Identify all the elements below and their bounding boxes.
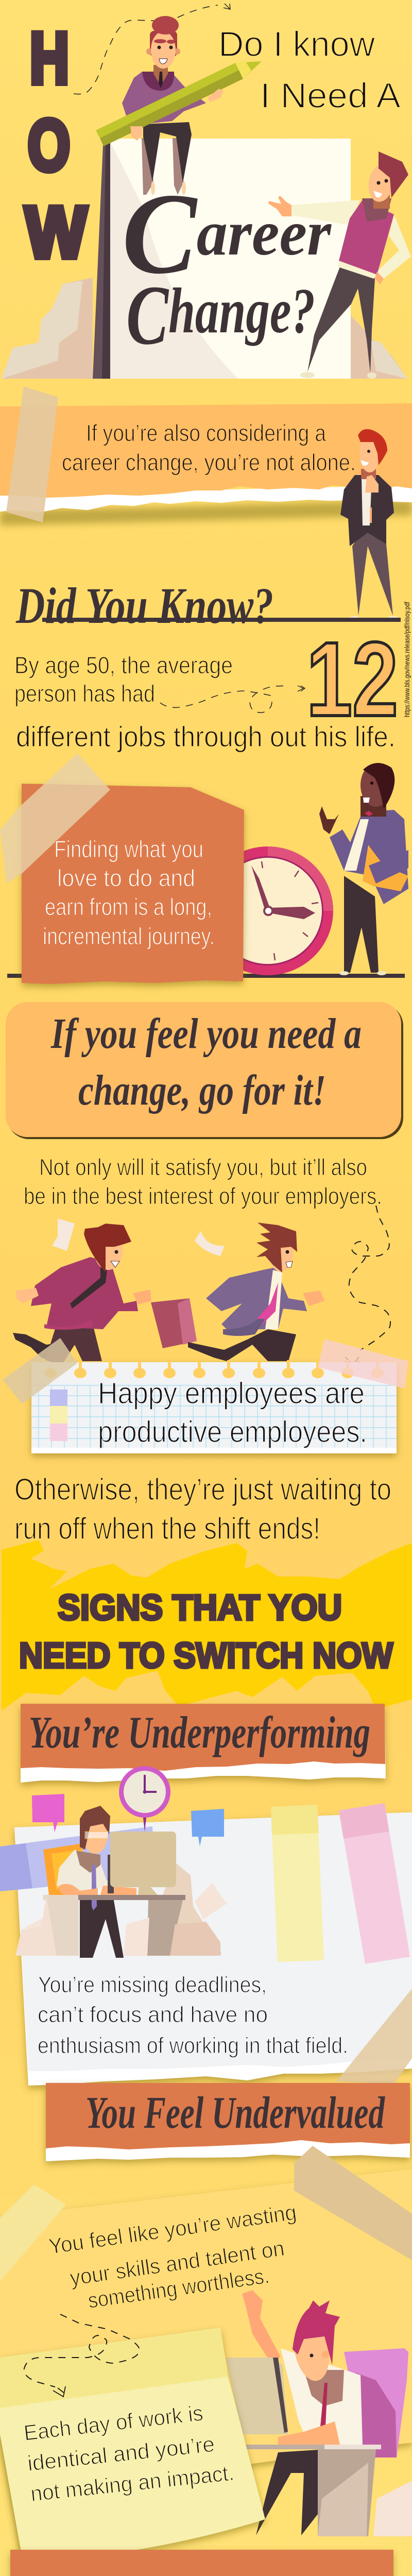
text block: otherwise: run off when the shift ends! (14, 1512, 320, 1546)
title word: HOW: W (25, 192, 87, 273)
character: man with folder (319, 763, 408, 975)
title word: HOW (25, 18, 87, 273)
banner (21, 1704, 386, 1783)
text: If you’re also considering a (86, 420, 327, 446)
paper sheet (14, 1812, 412, 2086)
panel: torn band, not alone (0, 386, 412, 619)
panel: go for it (6, 1002, 403, 1139)
script title: Career Change?: C (122, 169, 198, 298)
note text: incremental journey. (43, 923, 215, 950)
note text (47, 2200, 298, 2313)
stat text (14, 652, 396, 753)
paper: flying right (195, 1231, 225, 1256)
note text (43, 836, 215, 950)
tape (0, 753, 110, 884)
script title: Career Change?: hange? (168, 276, 315, 347)
tape (336, 1989, 412, 2084)
banner (10, 2550, 393, 2576)
tape: left (0, 2184, 66, 2281)
text block: employers (24, 1154, 382, 1209)
script title: Career Change?: areer (197, 198, 332, 269)
sticky note (0, 2328, 265, 2554)
character: man with pencil (96, 16, 262, 195)
panel: signs heading band (2, 1540, 412, 1710)
heading: Did You Know? (15, 577, 273, 634)
source url: https://www.bls.gov/news.release/pdf/nlsoy.pdf (403, 602, 411, 717)
stat text: person has had (14, 680, 155, 707)
arrow: dashed to 12 (160, 686, 305, 713)
note text: something worthless. (87, 2263, 271, 2313)
note text: your skills and talent on (68, 2236, 286, 2290)
note text: You feel like you’re wasting (47, 2200, 298, 2259)
panel: incremental journey (0, 753, 408, 984)
arrow: dashed to sticky (24, 2314, 140, 2397)
brush band (2, 1540, 412, 1710)
panel: Did You Know (14, 577, 411, 753)
sticky text: Each day of work is (23, 2401, 204, 2445)
note sheet (31, 1360, 397, 1453)
tape: right (294, 2146, 412, 2260)
speech bubble: pink (32, 1794, 64, 1832)
note: orange (22, 784, 244, 984)
big note background (0, 2169, 412, 2552)
note text: productive employees. (98, 1415, 367, 1449)
colour swatches (50, 1389, 67, 1441)
illustration: man at computer (226, 2290, 412, 2536)
note text: Happy employees are (98, 1377, 365, 1410)
note text: Finding what you (54, 836, 203, 862)
subtitle: Do I know I Need A (218, 24, 401, 115)
heading: SIGNS THAT YOU (58, 1587, 342, 1628)
script title: Career Change? (122, 169, 332, 362)
sticky text: identical and you’re (26, 2432, 216, 2476)
character: running man one (13, 1224, 151, 1365)
icon: wall clock (119, 1766, 170, 1832)
panel: underperforming (0, 1704, 412, 2086)
character: thinking man (340, 429, 398, 619)
text: career change, you’re not alone. (62, 449, 356, 476)
panel: undervalued (0, 2083, 412, 2554)
title word: HOW: O (28, 105, 70, 185)
text (62, 420, 356, 476)
sticky: pink (339, 1803, 410, 1964)
speech bubble: blue (191, 1809, 224, 1846)
heading (19, 1587, 393, 1675)
character: man pointing (268, 151, 411, 379)
rocks (2, 278, 407, 379)
stat text: By age 50, the average (14, 652, 233, 679)
sticky text: not making an impact. (29, 2461, 235, 2506)
book (93, 139, 351, 379)
character: running man two (188, 1223, 324, 1361)
script title: Career Change?: C (126, 268, 169, 362)
subtitle: Do I know I Need A: I Need A (260, 76, 401, 115)
text block: You’re missing deadlines, (38, 1972, 267, 1997)
illustration: man at desk with paper (15, 1806, 227, 1958)
text block: enthusiasm of working in that field. (38, 2033, 348, 2058)
text block: otherwise (14, 1472, 391, 1546)
text block (38, 1972, 348, 2058)
arrow: dashed path to subtitle (74, 4, 230, 94)
tape: right (318, 1339, 408, 1388)
note text: earn from is a long, (45, 893, 212, 920)
heading: change, go for it! (78, 1066, 326, 1114)
tape (6, 386, 58, 522)
panel: dread going to work (3, 2550, 405, 2576)
heading (50, 1010, 362, 1114)
panel: graph paper note (3, 1338, 408, 1453)
arrow: dashed to note (346, 1206, 390, 1369)
title word: HOW: H (30, 18, 69, 98)
text block: can’t focus and have no (38, 2002, 268, 2027)
sticky text (23, 2401, 235, 2506)
icon: briefcase (151, 1298, 197, 1348)
sticky: yellow (271, 1805, 324, 1962)
torn paper (0, 403, 412, 526)
note text (98, 1377, 367, 1449)
note text: love to do and (57, 865, 195, 891)
sticky: purple fold (0, 1843, 32, 1891)
sticky: purple (0, 1826, 154, 1891)
banner (46, 2083, 410, 2161)
underline (42, 618, 401, 622)
paper: flying left (52, 1218, 75, 1251)
icon: clock (202, 846, 333, 975)
subtitle: Do I know I Need A: Do I know (218, 24, 375, 64)
hero section (2, 4, 411, 379)
ground bar (7, 974, 405, 978)
tape: left (3, 1338, 77, 1404)
